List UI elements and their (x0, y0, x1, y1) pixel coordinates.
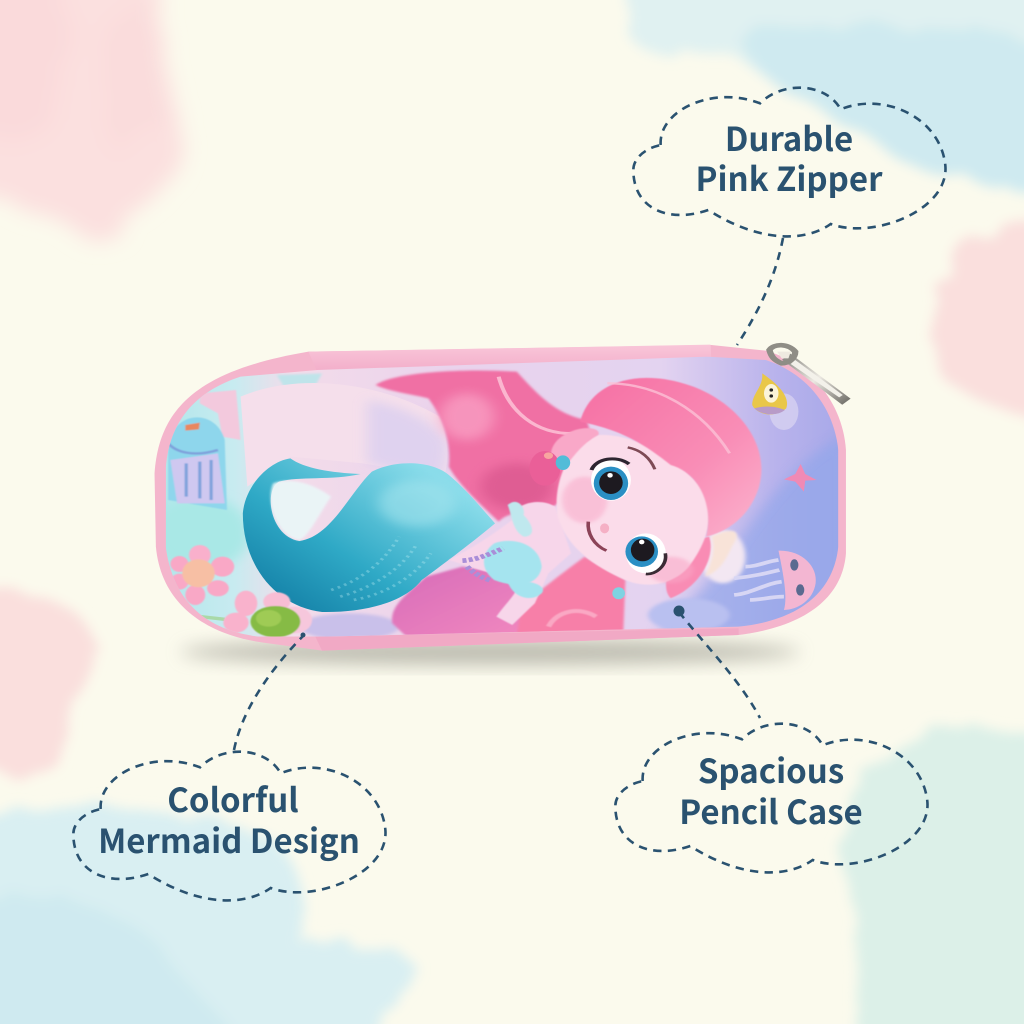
leader line (679, 612, 760, 718)
neck hair lock (551, 428, 599, 470)
lower hair right (517, 557, 625, 635)
right blue water (657, 433, 847, 633)
earring top (556, 455, 570, 470)
tail fluke (243, 458, 495, 612)
pale lock accent (705, 531, 737, 577)
top coral strip (276, 372, 322, 385)
side lock (666, 537, 711, 598)
jellyfish (734, 551, 816, 610)
eye lower (625, 533, 666, 574)
case shadow (180, 639, 800, 665)
zipper pull (769, 345, 846, 402)
leader line (234, 636, 303, 750)
arm and torso (449, 502, 571, 625)
tail scales (379, 480, 456, 527)
label: Pink Zipper (696, 153, 883, 201)
watercolor blob: right pink (931, 215, 1024, 415)
label: Colorful (167, 774, 299, 822)
leader dot (300, 632, 306, 638)
top band (308, 345, 711, 373)
top hair (580, 378, 761, 537)
tail highlight (271, 481, 331, 540)
mouth (588, 522, 606, 551)
watercolor blob: left pink (0, 589, 102, 776)
label: Durable (725, 113, 853, 161)
flower stem (186, 615, 225, 619)
cyan glow left (166, 500, 249, 564)
nose (600, 523, 609, 533)
fan shell (241, 383, 447, 487)
starfish (784, 464, 817, 492)
watercolor blob: top-left pink (0, 0, 185, 240)
eyebrow (628, 447, 655, 469)
callout bottom-right: Spacious Pencil Case (615, 606, 928, 872)
cheek blush (562, 477, 607, 523)
bottom band (315, 628, 739, 651)
leader line (737, 238, 783, 345)
sequin belt (462, 548, 503, 581)
label: Mermaid Design (98, 815, 360, 863)
hair shading (481, 463, 553, 510)
printed panel (166, 356, 838, 636)
bikini top (484, 541, 542, 585)
hair highlight (607, 383, 730, 453)
bubble behind fish (769, 393, 798, 430)
earring bottom (612, 587, 625, 599)
castle (168, 390, 241, 510)
watercolor blob: bottom-right green (846, 726, 1024, 1024)
pale seabed glow (700, 530, 745, 583)
callout top: Durable Pink Zipper (633, 88, 946, 345)
watercolor blob: top-right blue (625, 0, 1024, 190)
ear curl (529, 451, 560, 486)
back hair (375, 370, 603, 522)
flower two (223, 591, 312, 637)
cloud outline (633, 88, 946, 236)
face (557, 435, 709, 585)
eye upper (591, 459, 631, 501)
lower hair left (392, 567, 539, 638)
label: Spacious (698, 745, 844, 793)
cloud outline (73, 752, 386, 900)
hair strands (499, 377, 580, 434)
label: Pencil Case (679, 786, 863, 834)
lavender pool (648, 598, 730, 632)
pencil case (150, 340, 860, 670)
callout bottom-left: Colorful Mermaid Design (73, 632, 386, 900)
zipper body (155, 345, 846, 651)
yellow fish (752, 373, 787, 414)
watercolor blob: bottom-left blue (0, 809, 418, 1024)
cloud outline (615, 724, 928, 872)
flower one (170, 545, 234, 605)
leader dot (674, 606, 684, 616)
lavender seabed (302, 612, 398, 636)
hand (508, 502, 532, 537)
